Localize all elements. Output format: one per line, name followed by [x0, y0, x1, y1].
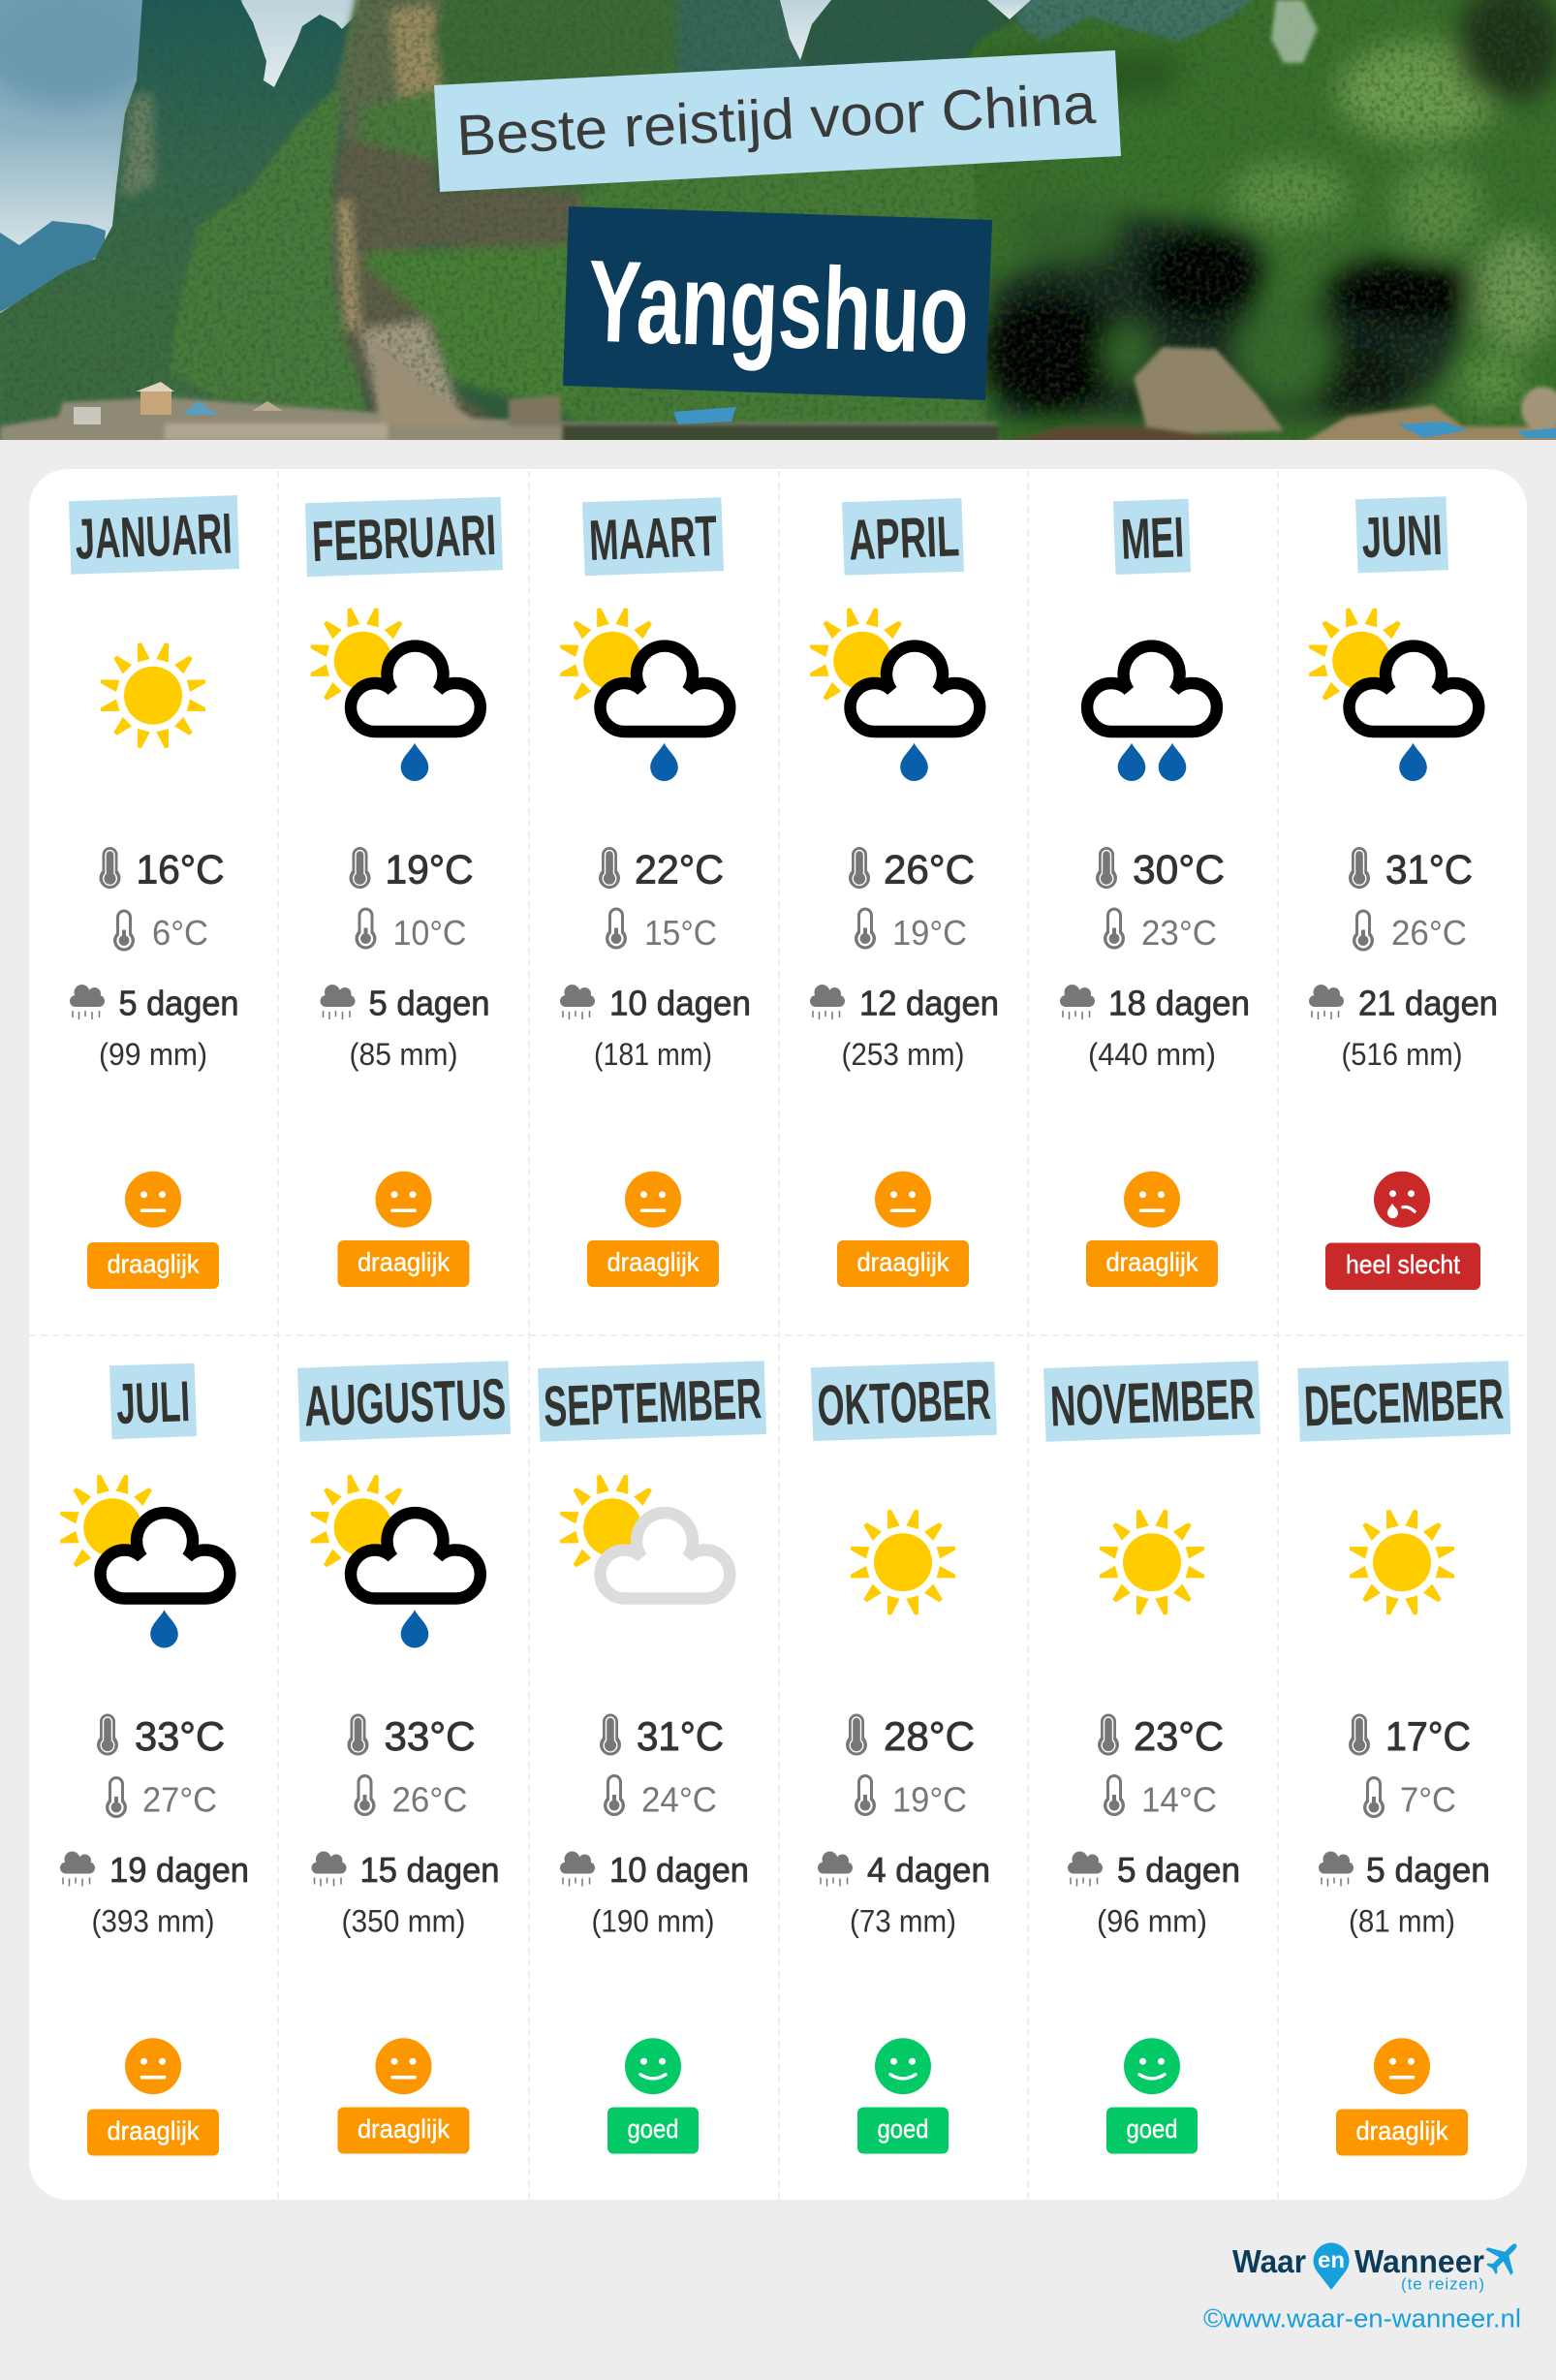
- rating: draaglijk: draaglijk: [358, 2114, 450, 2144]
- min temperature: [1104, 1774, 1217, 1820]
- logo: Waar en Wanneer: en: [1318, 2247, 1345, 2272]
- rain days: 5 dagen: [118, 984, 238, 1023]
- cell: mei: [1060, 499, 1250, 1287]
- rating: goed: goed: [1126, 2114, 1178, 2144]
- rating: draaglijk: draaglijk: [856, 1248, 949, 1277]
- rain days: 21 dagen: [1358, 984, 1498, 1023]
- logo: Waar en Wanneer: Waar: [1232, 2243, 1306, 2279]
- month label: oktober: [811, 1362, 997, 1441]
- rating: draaglijk: draaglijk: [358, 1248, 450, 1277]
- month label: juni: [1355, 496, 1448, 573]
- icon: happy face: [625, 2038, 681, 2094]
- min temperature: 7°C: [1400, 1779, 1456, 1820]
- min temperature: [355, 1774, 467, 1820]
- rainfall amount: (181 mm): [594, 1037, 712, 1072]
- month label: november: [1043, 1361, 1260, 1442]
- icon: neutral face: [125, 2038, 181, 2094]
- min temperature: [1104, 907, 1217, 953]
- icon: sun: [101, 642, 205, 748]
- icon: crying face: [1374, 1172, 1430, 1228]
- subtitle banner: Beste reistijd voor China: [455, 72, 1097, 168]
- rain days: 5 dagen: [1366, 1850, 1490, 1890]
- month label: juni: JUNI: [1360, 503, 1444, 570]
- rain days: 15 dagen: [360, 1850, 500, 1890]
- month label: november: NOVEMBER: [1049, 1366, 1256, 1439]
- max temperature: 33°C: [135, 1713, 225, 1759]
- rainfall amount: (516 mm): [1341, 1037, 1463, 1072]
- month label: juli: [109, 1363, 197, 1439]
- rating: draaglijk: [837, 1240, 969, 1287]
- max temperature: 19°C: [386, 847, 473, 892]
- min temperature: 24°C: [641, 1779, 717, 1820]
- max temperature: 31°C: [1385, 847, 1473, 892]
- min temperature: 26°C: [1391, 913, 1467, 953]
- min temperature: 19°C: [892, 913, 967, 953]
- month label: april: [842, 498, 964, 576]
- month label: februari: [305, 497, 503, 577]
- min temperature: 14°C: [1141, 1779, 1217, 1820]
- max temperature: 28°C: [884, 1713, 975, 1759]
- cell: juli: [60, 1363, 249, 2155]
- icon: neutral face: [625, 1172, 681, 1228]
- cell: maart: [560, 497, 751, 1287]
- cell: augustus: [297, 1361, 511, 2153]
- month label: januari: [69, 495, 239, 575]
- rating: draaglijk: [337, 2107, 469, 2153]
- icon: sun: [1350, 1510, 1454, 1614]
- max temperature: [1349, 847, 1473, 892]
- icon: sun with rain cloud: [311, 1475, 481, 1647]
- max temperature: 23°C: [1134, 1713, 1224, 1759]
- cell: oktober: [811, 1362, 997, 2153]
- rainfall amount: (190 mm): [591, 1903, 715, 1938]
- cell: september: [538, 1361, 766, 2153]
- rainfall amount: (350 mm): [341, 1903, 465, 1938]
- icon: sun: [851, 1510, 955, 1614]
- min temperature: [604, 1774, 717, 1820]
- rain days: 10 dagen: [609, 1850, 749, 1890]
- max temperature: [600, 1713, 724, 1759]
- icon: sun with rain cloud: [810, 608, 980, 781]
- min temperature: 10°C: [393, 913, 467, 953]
- rating: draaglijk: [1336, 2109, 1468, 2155]
- max temperature: 16°C: [136, 847, 225, 892]
- website credit: ©www.waar-en-wanneer.nl: [1203, 2304, 1521, 2333]
- icon: sun: [1100, 1510, 1204, 1614]
- rain days: 18 dagen: [1108, 984, 1250, 1023]
- cell: december: [1297, 1361, 1510, 2155]
- max temperature: 26°C: [884, 847, 975, 892]
- min temperature: 23°C: [1141, 913, 1217, 953]
- rainfall amount: (253 mm): [841, 1037, 965, 1072]
- month label: augustus: [297, 1361, 511, 1442]
- month label: september: [538, 1361, 766, 1442]
- icon: airplane: [1478, 2232, 1529, 2282]
- rain days: 4 dagen: [867, 1850, 990, 1890]
- rainfall amount: (81 mm): [1349, 1903, 1455, 1938]
- rain days: 19 dagen: [109, 1850, 249, 1890]
- rainfall amount: (73 mm): [850, 1903, 956, 1938]
- icon: neutral face: [875, 1172, 931, 1228]
- min temperature: [855, 1774, 967, 1820]
- min temperature: [1363, 1776, 1456, 1820]
- rating: goed: goed: [628, 2114, 678, 2144]
- rating: draaglijk: [337, 1240, 469, 1287]
- panel: monthly climate table: [29, 469, 1527, 2200]
- rainfall amount: (99 mm): [99, 1037, 207, 1072]
- month label: september: SEPTEMBER: [543, 1366, 762, 1439]
- month label: augustus: AUGUSTUS: [303, 1366, 507, 1438]
- rainfall amount: (85 mm): [349, 1037, 457, 1072]
- min temperature: 6°C: [152, 913, 208, 953]
- month label: maart: [582, 497, 724, 576]
- icon: neutral face: [376, 1172, 432, 1228]
- month label: mei: [1113, 499, 1191, 575]
- month label: oktober: OKTOBER: [816, 1367, 992, 1438]
- cell: november: [1043, 1361, 1260, 2153]
- rain days: [70, 984, 238, 1023]
- rating: goed: [607, 2107, 699, 2153]
- cell: februari: [305, 497, 503, 1287]
- max temperature: [99, 847, 225, 892]
- cell: januari: [69, 495, 239, 1289]
- rain days: 12 dagen: [859, 984, 999, 1023]
- icon: sun with rain cloud: [311, 608, 481, 781]
- rating: draaglijk: [1086, 1240, 1218, 1287]
- rating: draaglijk: draaglijk: [1356, 2116, 1448, 2145]
- rainfall amount: (96 mm): [1097, 1903, 1207, 1938]
- min temperature: 27°C: [142, 1779, 217, 1820]
- rating: goed: [1106, 2107, 1198, 2153]
- rating: draaglijk: draaglijk: [107, 1250, 200, 1279]
- month label: januari: JANUARI: [74, 501, 233, 572]
- max temperature: [349, 847, 473, 892]
- max temperature: [1349, 1713, 1471, 1759]
- rating: draaglijk: [587, 1240, 719, 1287]
- icon: sun with rain cloud: [560, 608, 730, 781]
- max temperature: 17°C: [1385, 1713, 1471, 1759]
- month label: mei: MEI: [1120, 505, 1185, 572]
- rating: draaglijk: draaglijk: [1106, 1248, 1198, 1277]
- rating: heel slecht: [1325, 1242, 1480, 1290]
- max temperature: 30°C: [1133, 847, 1225, 892]
- icon: sun with rain cloud: [1309, 608, 1478, 781]
- icon: happy face: [1124, 2038, 1180, 2094]
- month label: maart: MAART: [588, 504, 718, 573]
- rating: draaglijk: [87, 2109, 219, 2155]
- icon: neutral face: [125, 1172, 181, 1228]
- rating: goed: goed: [878, 2114, 928, 2144]
- title banner: Yangshuo: Yangshuo: [586, 236, 971, 379]
- min temperature: 15°C: [644, 913, 717, 953]
- rating: heel slecht: heel slecht: [1346, 1250, 1460, 1279]
- rain days: 5 dagen: [1117, 1850, 1240, 1890]
- icon: neutral face: [376, 2038, 432, 2094]
- icon: neutral face: [1374, 2038, 1430, 2094]
- hero photo: karst mountains along the Li river: [0, 0, 1556, 455]
- icon: sun with rain cloud: [60, 1475, 230, 1647]
- rating: draaglijk: [87, 1242, 219, 1289]
- logo: Waar en Wanneer: Wanneer: [1354, 2243, 1484, 2279]
- max temperature: 33°C: [384, 1713, 475, 1759]
- icon: neutral face: [1124, 1172, 1180, 1228]
- icon: happy face: [875, 2038, 931, 2094]
- logo: Waar en Wanneer: (te reizen): [1401, 2275, 1484, 2294]
- rainfall amount: (440 mm): [1088, 1037, 1216, 1072]
- month label: februari: FEBRUARI: [311, 503, 497, 574]
- cell: juni: [1309, 496, 1498, 1290]
- icon: rain cloud with two drops: [1087, 646, 1217, 781]
- max temperature: 22°C: [635, 847, 724, 892]
- min temperature: [606, 907, 717, 953]
- rating: goed: [857, 2107, 949, 2153]
- min temperature: [106, 1776, 217, 1820]
- logo: Waar en Wanneer: [1232, 2232, 1529, 2294]
- min temperature: [855, 907, 967, 953]
- max temperature: 31°C: [637, 1713, 724, 1759]
- rating: draaglijk: draaglijk: [107, 2116, 200, 2145]
- cell: april: [810, 498, 999, 1287]
- rain days: [320, 984, 490, 1023]
- icon: map pin: [1314, 2242, 1349, 2290]
- rainfall amount: (393 mm): [91, 1903, 215, 1938]
- min temperature: 26°C: [391, 1779, 467, 1820]
- min temperature: 19°C: [892, 1779, 967, 1820]
- title banner: Yangshuo: [563, 206, 992, 400]
- rain days: 5 dagen: [368, 984, 490, 1023]
- min temperature: [355, 907, 467, 953]
- min temperature: [1353, 909, 1467, 953]
- icon: sun with grey cloud: [560, 1475, 730, 1599]
- subtitle banner: [434, 50, 1121, 192]
- rain days: 10 dagen: [609, 984, 751, 1023]
- month label: april: APRIL: [848, 504, 960, 573]
- rating: draaglijk: draaglijk: [607, 1248, 700, 1277]
- month label: juli: JULI: [115, 1369, 191, 1436]
- min temperature: [113, 909, 208, 953]
